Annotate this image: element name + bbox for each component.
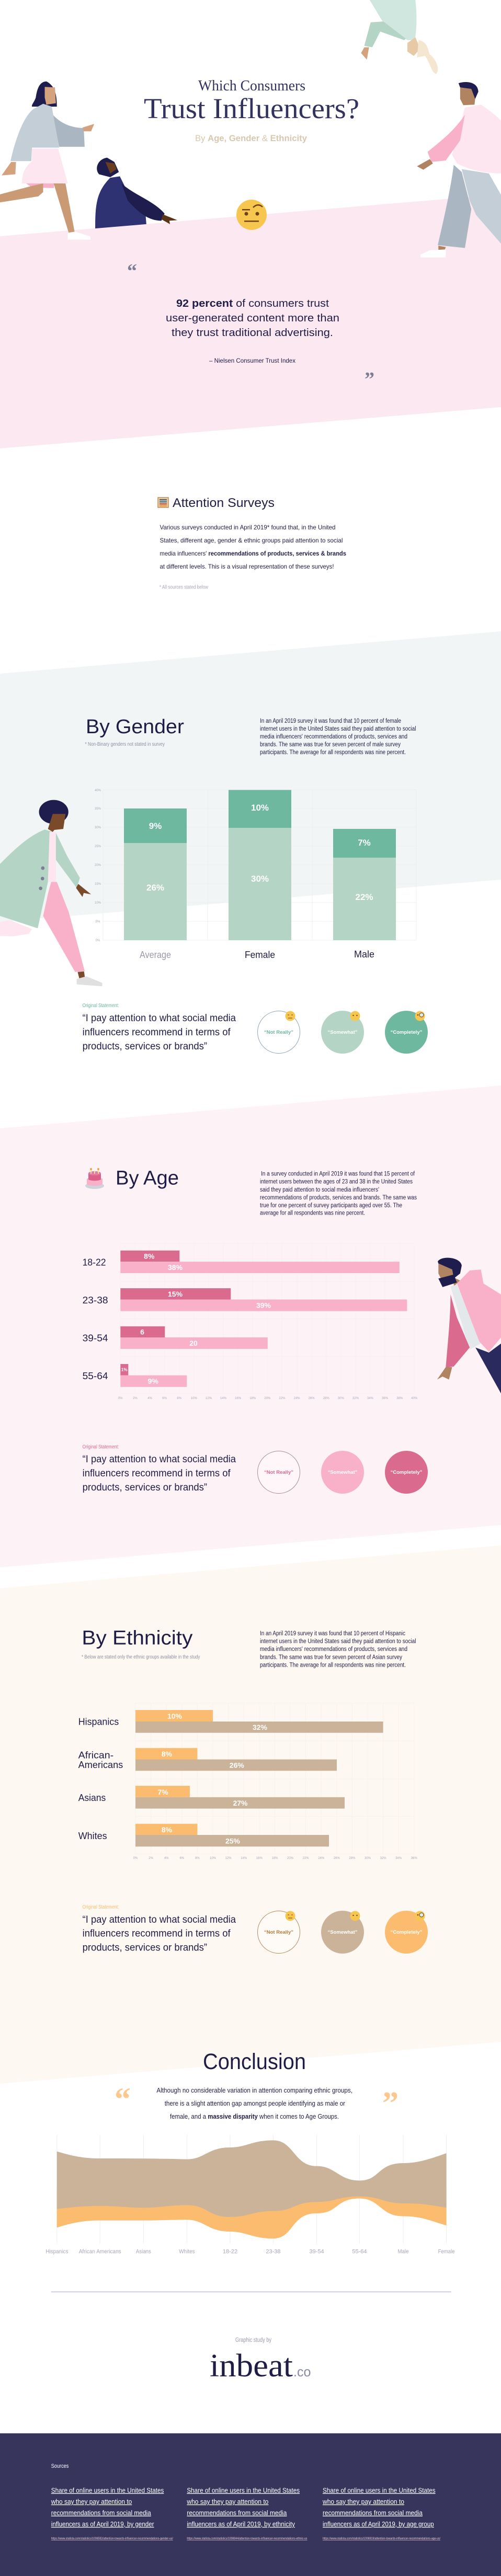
original statement: products, services or brands” bbox=[83, 1041, 207, 1052]
x axis labels: 22% bbox=[303, 1857, 309, 1860]
footnote: * All sources stated below bbox=[160, 584, 209, 591]
category labels bbox=[140, 949, 374, 960]
bar: average: 26% bbox=[146, 883, 164, 893]
source: by ethnicity: influencers as of April 2019, by ethnicity bbox=[187, 2520, 295, 2528]
response legend circles: “Somewhat” bbox=[327, 1030, 358, 1035]
original statement bbox=[83, 1904, 236, 1954]
y axis labels bbox=[95, 789, 101, 942]
row: hispanics: 10% bbox=[167, 1712, 183, 1720]
panel: conclusion bbox=[45, 2049, 455, 2255]
panel: by ethnicity bbox=[0, 1545, 501, 2084]
x axis labels: 34% bbox=[395, 1857, 402, 1860]
response legend circles: “Completely” bbox=[391, 1930, 423, 1935]
source: by gender: Share of online users in the United States bbox=[51, 2487, 164, 2494]
credit: graphic study by inbeat bbox=[210, 2337, 311, 2384]
axis labels: Female bbox=[438, 2249, 455, 2255]
x axis labels: 18% bbox=[271, 1857, 278, 1860]
row: african-americans bbox=[78, 1748, 337, 1771]
icon: opening quote mark: “ bbox=[127, 260, 137, 282]
response legend circles: “Somewhat” bbox=[327, 1470, 358, 1475]
description: average for all respondents was nine percent. bbox=[260, 1210, 365, 1217]
conclusion text: female, and a massive disparity when it comes to Age Groups. bbox=[170, 2113, 339, 2120]
row: 23-38 bbox=[83, 1288, 407, 1311]
x axis labels: 10% bbox=[191, 1397, 197, 1400]
row: hispanics: 32% bbox=[253, 1723, 268, 1731]
source: by ethnicity: https://www.statista.com/statistics/1006944/attention-towards-influencer-recommendations-ethnic-us bbox=[187, 2537, 307, 2540]
description: brands. The same was true for seven percent of Asian survey bbox=[260, 1654, 402, 1660]
x axis labels: 6% bbox=[162, 1397, 167, 1400]
illustration: falling woman in mint bbox=[361, 0, 438, 74]
description: In an April 2019 survey it was found that 10 percent of female bbox=[260, 718, 401, 724]
illustration: walking man bbox=[417, 82, 501, 258]
x axis labels bbox=[133, 1857, 417, 1860]
original statement: “I pay attention to what social media bbox=[83, 1454, 236, 1465]
intro paragraph bbox=[160, 524, 346, 570]
source: by gender bbox=[51, 2487, 173, 2540]
x axis labels: 26% bbox=[309, 1397, 315, 1400]
category labels: Female bbox=[245, 950, 275, 960]
intro paragraph: States, different age, gender & ethnic groups paid attention to social bbox=[160, 537, 343, 544]
description: media influencers' recommendations of products, services and bbox=[260, 1646, 407, 1653]
row: 55-64: 9% bbox=[148, 1377, 158, 1385]
logo wordmark: inbeat bbox=[210, 2348, 293, 2384]
response legend circles bbox=[257, 1911, 428, 1954]
heading: Conclusion bbox=[203, 2049, 306, 2074]
stacked bar chart bbox=[95, 789, 416, 960]
source: by gender: https://www.statista.com/statistics/1006592/attention-towards-influencer-recommendations-gender-us/ bbox=[51, 2537, 173, 2540]
original statement: influencers recommend in terms of bbox=[83, 1027, 231, 1038]
row: hispanics bbox=[78, 1710, 383, 1733]
intro paragraph: Various surveys conducted in April 2019* found that, in the United bbox=[160, 524, 336, 531]
response legend circles: “Not Really” bbox=[264, 1930, 293, 1935]
description: said they paid attention to social media influencers' bbox=[260, 1187, 379, 1193]
row: hispanics: Hispanics bbox=[78, 1717, 119, 1727]
axis labels: 23-38 bbox=[266, 2249, 280, 2255]
description: participants. The average for all respondents was nine percent. bbox=[260, 749, 406, 756]
quote text: they trust traditional advertising. bbox=[172, 327, 333, 339]
x axis labels: 2% bbox=[149, 1857, 154, 1860]
x axis labels: 4% bbox=[164, 1857, 169, 1860]
source: by ethnicity bbox=[186, 2487, 307, 2540]
bar: female: 30% bbox=[251, 874, 269, 884]
row: african-americans: 8% bbox=[162, 1750, 173, 1758]
source: by ethnicity: recommendations from social media bbox=[187, 2509, 287, 2517]
y axis labels: 25% bbox=[95, 845, 101, 848]
quote text: user-generated content more than bbox=[166, 313, 339, 324]
conclusion text: Although no considerable variation in attention comparing ethnic groups, bbox=[156, 2087, 352, 2094]
x axis labels: 26% bbox=[334, 1857, 340, 1860]
description: participants. The average for all respondents was nine percent. bbox=[260, 1662, 406, 1668]
bar: female bbox=[229, 790, 291, 940]
original statement: Original Statement: bbox=[83, 1003, 119, 1009]
source: by age group: who say they pay attention to bbox=[322, 2498, 404, 2505]
x axis labels: 8% bbox=[195, 1857, 200, 1860]
description bbox=[260, 1171, 417, 1217]
description: internet users between the ages of 23 and 38 in the United States bbox=[260, 1179, 413, 1185]
y axis labels: 5% bbox=[96, 920, 100, 923]
axis labels bbox=[45, 2249, 455, 2255]
title: Trust Influencers? bbox=[144, 93, 359, 124]
source: by gender: recommendations from social media bbox=[51, 2509, 151, 2517]
x axis labels: 14% bbox=[241, 1857, 247, 1860]
x axis labels: 24% bbox=[318, 1857, 325, 1860]
stream chart bbox=[45, 2135, 455, 2255]
x axis labels: 0% bbox=[118, 1397, 123, 1400]
x axis labels: 22% bbox=[279, 1397, 286, 1400]
description: In an April 2019 survey it was found that 10 percent of Hispanic bbox=[260, 1631, 405, 1637]
x axis labels: 20% bbox=[264, 1397, 271, 1400]
response legend circles bbox=[257, 1451, 428, 1494]
description: media influencers' recommendations of products, services and bbox=[260, 734, 407, 740]
row: 55-64: 55-64 bbox=[83, 1371, 108, 1381]
axis labels: Hispanics bbox=[45, 2249, 69, 2255]
bar: female: 10% bbox=[251, 803, 269, 813]
description: brands. The same was true for seven percent of male survey bbox=[260, 742, 401, 748]
row: 18-22: 38% bbox=[168, 1263, 183, 1272]
illustration: bearded man in pink bbox=[437, 1258, 501, 1393]
y axis labels: 20% bbox=[95, 864, 101, 867]
row: asians bbox=[78, 1786, 345, 1809]
x axis labels: 36% bbox=[411, 1857, 417, 1860]
original statement bbox=[83, 1445, 236, 1493]
description bbox=[260, 718, 416, 756]
row: 39-54: 20 bbox=[189, 1339, 198, 1347]
panel: by gender bbox=[0, 631, 501, 1054]
y axis labels: 30% bbox=[95, 826, 101, 829]
original statement: “I pay attention to what social media bbox=[83, 1914, 236, 1925]
description: internet users in the United States said they paid attention to social bbox=[260, 1638, 416, 1645]
response legend circles: “Not Really” bbox=[264, 1470, 293, 1475]
source: by ethnicity: Share of online users in the United States bbox=[187, 2487, 300, 2494]
icon: neutral emoji bbox=[350, 1011, 360, 1021]
response legend circles: “Completely” bbox=[391, 1030, 423, 1035]
x axis labels: 38% bbox=[396, 1397, 403, 1400]
bar: average: 9% bbox=[149, 821, 162, 831]
original statement: products, services or brands” bbox=[83, 1943, 207, 1954]
quote text bbox=[166, 298, 339, 339]
row: african-americans: Americans bbox=[78, 1760, 123, 1770]
row: asians: Asians bbox=[78, 1793, 106, 1803]
x axis labels: 30% bbox=[338, 1397, 344, 1400]
original statement bbox=[83, 1003, 236, 1052]
row: 23-38: 23-38 bbox=[83, 1295, 108, 1306]
subtitle: By Age, Gender & Ethnicity bbox=[195, 133, 308, 143]
description: true for one percent of survey participants aged over 55. The bbox=[260, 1203, 402, 1209]
icon: birthday cake bbox=[85, 1168, 104, 1189]
axis labels: Whites bbox=[179, 2249, 195, 2255]
row: whites: 8% bbox=[162, 1826, 173, 1834]
heading: By Age bbox=[116, 1168, 179, 1189]
x axis labels: 30% bbox=[365, 1857, 371, 1860]
original statement: Original Statement: bbox=[83, 1445, 119, 1450]
row: 23-38: 39% bbox=[256, 1301, 271, 1310]
illustration: woman in mint coat bbox=[0, 800, 103, 986]
original statement: influencers recommend in terms of bbox=[83, 1468, 231, 1479]
conclusion text bbox=[156, 2087, 352, 2120]
icon: monocle emoji bbox=[415, 1911, 425, 1921]
response legend circles: “Somewhat” bbox=[327, 1930, 358, 1935]
row: 18-22 bbox=[83, 1251, 400, 1273]
source: by gender: who say they pay attention to bbox=[51, 2498, 132, 2505]
heading: By Ethnicity bbox=[82, 1627, 192, 1649]
original statement: Original Statement: bbox=[83, 1904, 119, 1910]
response legend circles: “Completely” bbox=[391, 1470, 423, 1475]
category labels: Average bbox=[140, 950, 171, 960]
x axis labels: 16% bbox=[256, 1857, 263, 1860]
icon: closing quote mark: ” bbox=[365, 368, 374, 390]
axis labels: Male bbox=[397, 2249, 409, 2255]
x axis labels bbox=[118, 1397, 418, 1400]
x axis labels: 36% bbox=[382, 1397, 389, 1400]
icon: closing quote mark: ” bbox=[382, 2086, 398, 2121]
x axis labels: 32% bbox=[352, 1397, 359, 1400]
source: by age group: recommendations from social media bbox=[323, 2509, 423, 2517]
response legend circles: “Not Really” bbox=[264, 1030, 293, 1035]
panel: attention surveys intro bbox=[158, 496, 346, 591]
x axis labels: 34% bbox=[367, 1397, 374, 1400]
intro paragraph: media influencers' recommendations of products, services & brands bbox=[160, 550, 346, 557]
row: asians: 27% bbox=[233, 1799, 248, 1807]
icon: expressionless emoji bbox=[286, 1911, 295, 1921]
row: 39-54 bbox=[83, 1326, 268, 1349]
description: In a survey conducted in April 2019 it was found that 15 percent of bbox=[261, 1171, 415, 1177]
original statement: products, services or brands” bbox=[83, 1482, 207, 1493]
response legend circles bbox=[257, 1011, 428, 1054]
axis labels: 39-54 bbox=[309, 2249, 324, 2255]
x axis labels: 40% bbox=[411, 1397, 418, 1400]
quote attribution: – Nielsen Consumer Trust Index bbox=[209, 357, 295, 364]
source: by age group: https://www.statista.com/statistics/1006919/attention-towards-influencer-recommendations-age-us/ bbox=[323, 2537, 440, 2540]
illustration: walking woman bbox=[0, 82, 94, 240]
heading: By Gender bbox=[86, 716, 184, 738]
source: by ethnicity: who say they pay attention to bbox=[186, 2498, 268, 2505]
row: whites bbox=[78, 1824, 329, 1846]
bar: male: 22% bbox=[355, 892, 373, 902]
x axis labels: 10% bbox=[210, 1857, 217, 1860]
panel: hero bbox=[0, 0, 501, 448]
axis labels: African Americans bbox=[79, 2249, 121, 2255]
footnote: * Below are stated only the ethnic groups available in the study bbox=[82, 1655, 200, 1660]
row: 39-54: 39-54 bbox=[83, 1333, 108, 1343]
x axis labels: 2% bbox=[133, 1397, 138, 1400]
pink quote band bbox=[0, 194, 501, 448]
row: 23-38: 15% bbox=[168, 1290, 183, 1298]
footnote: * Non-Binary genders not stated in survey bbox=[85, 742, 165, 747]
heading: Attention Surveys bbox=[173, 496, 275, 510]
x axis labels: 0% bbox=[133, 1857, 138, 1860]
icon: raised eyebrow emoji bbox=[236, 200, 267, 230]
bar: average bbox=[124, 808, 187, 940]
y axis labels: 40% bbox=[95, 789, 101, 792]
sources heading: Sources bbox=[51, 2463, 69, 2469]
title bbox=[144, 77, 359, 124]
row: african-americans: African- bbox=[78, 1750, 113, 1761]
y axis labels: 0% bbox=[96, 939, 100, 942]
x axis labels: 28% bbox=[349, 1857, 356, 1860]
bar: male: 7% bbox=[358, 838, 371, 848]
icon: opening quote mark: “ bbox=[115, 2082, 131, 2117]
description: recommendations of products, services and brands. The same was bbox=[260, 1195, 417, 1201]
x axis labels: 4% bbox=[147, 1397, 153, 1400]
source: by gender: influencers as of April 2019, by gender bbox=[51, 2520, 154, 2528]
axis labels: 55-64 bbox=[352, 2249, 367, 2255]
source: by age group bbox=[322, 2487, 440, 2540]
x axis labels: 32% bbox=[380, 1857, 386, 1860]
x axis labels: 8% bbox=[177, 1397, 182, 1400]
row: 18-22: 8% bbox=[144, 1252, 155, 1261]
logo wordmark: .co bbox=[293, 2364, 311, 2379]
description: internet users in the United States said they paid attention to social bbox=[260, 726, 416, 732]
y axis labels: 10% bbox=[95, 902, 101, 905]
y axis labels: 35% bbox=[95, 807, 101, 811]
original statement: “I pay attention to what social media bbox=[83, 1013, 236, 1024]
description bbox=[260, 1631, 416, 1668]
stream: completely bbox=[57, 2188, 447, 2238]
illustration: seated man bbox=[95, 158, 177, 228]
bar: male bbox=[333, 829, 396, 940]
x axis labels: 12% bbox=[206, 1397, 212, 1400]
intro paragraph: at different levels. This is a visual representation of these surveys! bbox=[160, 563, 334, 570]
source: by age group: Share of online users in the United States bbox=[323, 2487, 436, 2494]
y axis labels: 15% bbox=[95, 883, 101, 886]
source: by age group: influencers as of April 2019, by age group bbox=[323, 2520, 434, 2528]
title: Which Consumers bbox=[198, 77, 305, 94]
row: 55-64: 1% bbox=[121, 1367, 127, 1372]
category labels: Male bbox=[354, 949, 374, 960]
axis labels: 18-22 bbox=[223, 2249, 237, 2255]
x axis labels: 14% bbox=[220, 1397, 227, 1400]
conclusion text: there is a slight attention gap amongst people identifying as male or bbox=[165, 2100, 345, 2107]
row: african-americans: 26% bbox=[230, 1761, 244, 1770]
row: 39-54: 6 bbox=[140, 1327, 144, 1336]
x axis labels: 16% bbox=[235, 1397, 242, 1400]
row: whites: Whites bbox=[78, 1831, 107, 1841]
icon: expressionless emoji bbox=[286, 1011, 295, 1021]
row: asians: 7% bbox=[157, 1788, 168, 1796]
horizontal bar chart: ethnicity bbox=[78, 1703, 417, 1860]
stream: somewhat bbox=[57, 2140, 447, 2217]
row: 55-64 bbox=[83, 1364, 187, 1387]
original statement: influencers recommend in terms of bbox=[83, 1928, 231, 1939]
row: whites: 25% bbox=[225, 1837, 241, 1845]
icon: abacus bbox=[158, 498, 168, 507]
x axis labels: 18% bbox=[249, 1397, 256, 1400]
panel: sources footer bbox=[0, 2433, 501, 2576]
horizontal bar chart: age bbox=[83, 1243, 418, 1400]
quote text: 92 percent of consumers trust bbox=[176, 298, 329, 309]
axis labels: Asians bbox=[136, 2249, 151, 2255]
icon: monocle emoji bbox=[415, 1011, 425, 1021]
icon: neutral emoji bbox=[350, 1911, 360, 1921]
x axis labels: 12% bbox=[225, 1857, 232, 1860]
x axis labels: 24% bbox=[293, 1397, 300, 1400]
row: 18-22: 18-22 bbox=[83, 1257, 106, 1268]
credit: graphic study by inbeat: Graphic study by bbox=[235, 2337, 271, 2343]
x axis labels: 28% bbox=[323, 1397, 329, 1400]
panel: by age bbox=[0, 1085, 501, 1567]
x axis labels: 20% bbox=[287, 1857, 294, 1860]
x axis labels: 6% bbox=[179, 1857, 185, 1860]
